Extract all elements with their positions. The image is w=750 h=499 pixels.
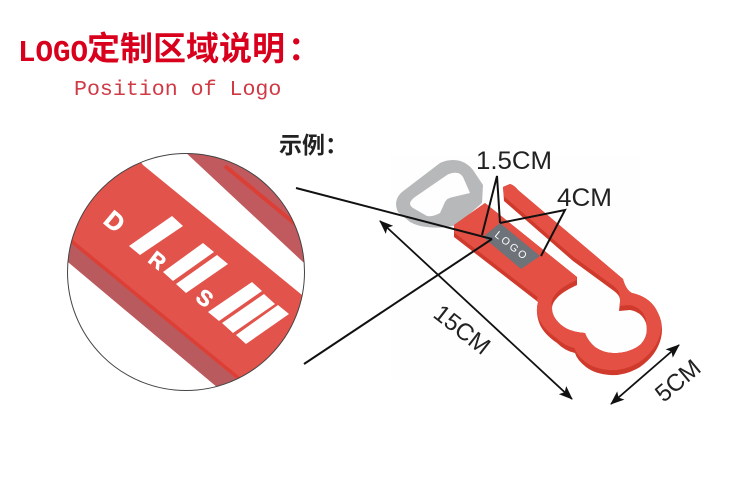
arrow: 15CM dimension <box>380 221 572 399</box>
arrow: 5CM dimension: 5CM <box>650 354 706 408</box>
metal head <box>396 160 483 228</box>
title: LOGO customization area <box>18 30 321 71</box>
icon: bottle opener product <box>396 160 662 376</box>
logo letters: D <box>98 205 130 238</box>
grey logo plate <box>483 223 540 269</box>
title: LOGO customization area: LOGO <box>18 36 88 71</box>
annotation: 1.5CM width: 1.5CM <box>476 147 552 175</box>
annotation: 4CM length: 4CM <box>557 184 612 212</box>
logo letters: S <box>191 284 218 312</box>
heading: example: ： <box>325 132 348 158</box>
logo letters <box>98 205 218 312</box>
annotation: 1.5CM width <box>476 147 552 235</box>
callout lines to magnified circle <box>296 188 492 364</box>
panel: magnified circle detail <box>67 153 305 391</box>
annotation: 4CM length <box>500 184 612 256</box>
red stripe upper right <box>187 154 304 262</box>
circle outline <box>68 154 304 390</box>
red handle <box>454 184 662 376</box>
red band <box>68 162 302 386</box>
logo bars <box>129 216 289 344</box>
subtitle: Position of Logo: Position of Logo <box>74 78 281 102</box>
plate text: LOGO <box>492 229 531 263</box>
arrow: 15CM dimension: 15CM <box>428 300 495 360</box>
heading: example: 示例 <box>279 132 325 158</box>
arrow: 5CM dimension <box>611 345 706 408</box>
heading: example <box>279 132 348 158</box>
shaded edge of band <box>60 242 240 387</box>
title: LOGO customization area: 定制区域说明 <box>87 30 285 67</box>
logo letters: R <box>144 247 170 275</box>
title: LOGO customization area: ： <box>288 30 321 67</box>
